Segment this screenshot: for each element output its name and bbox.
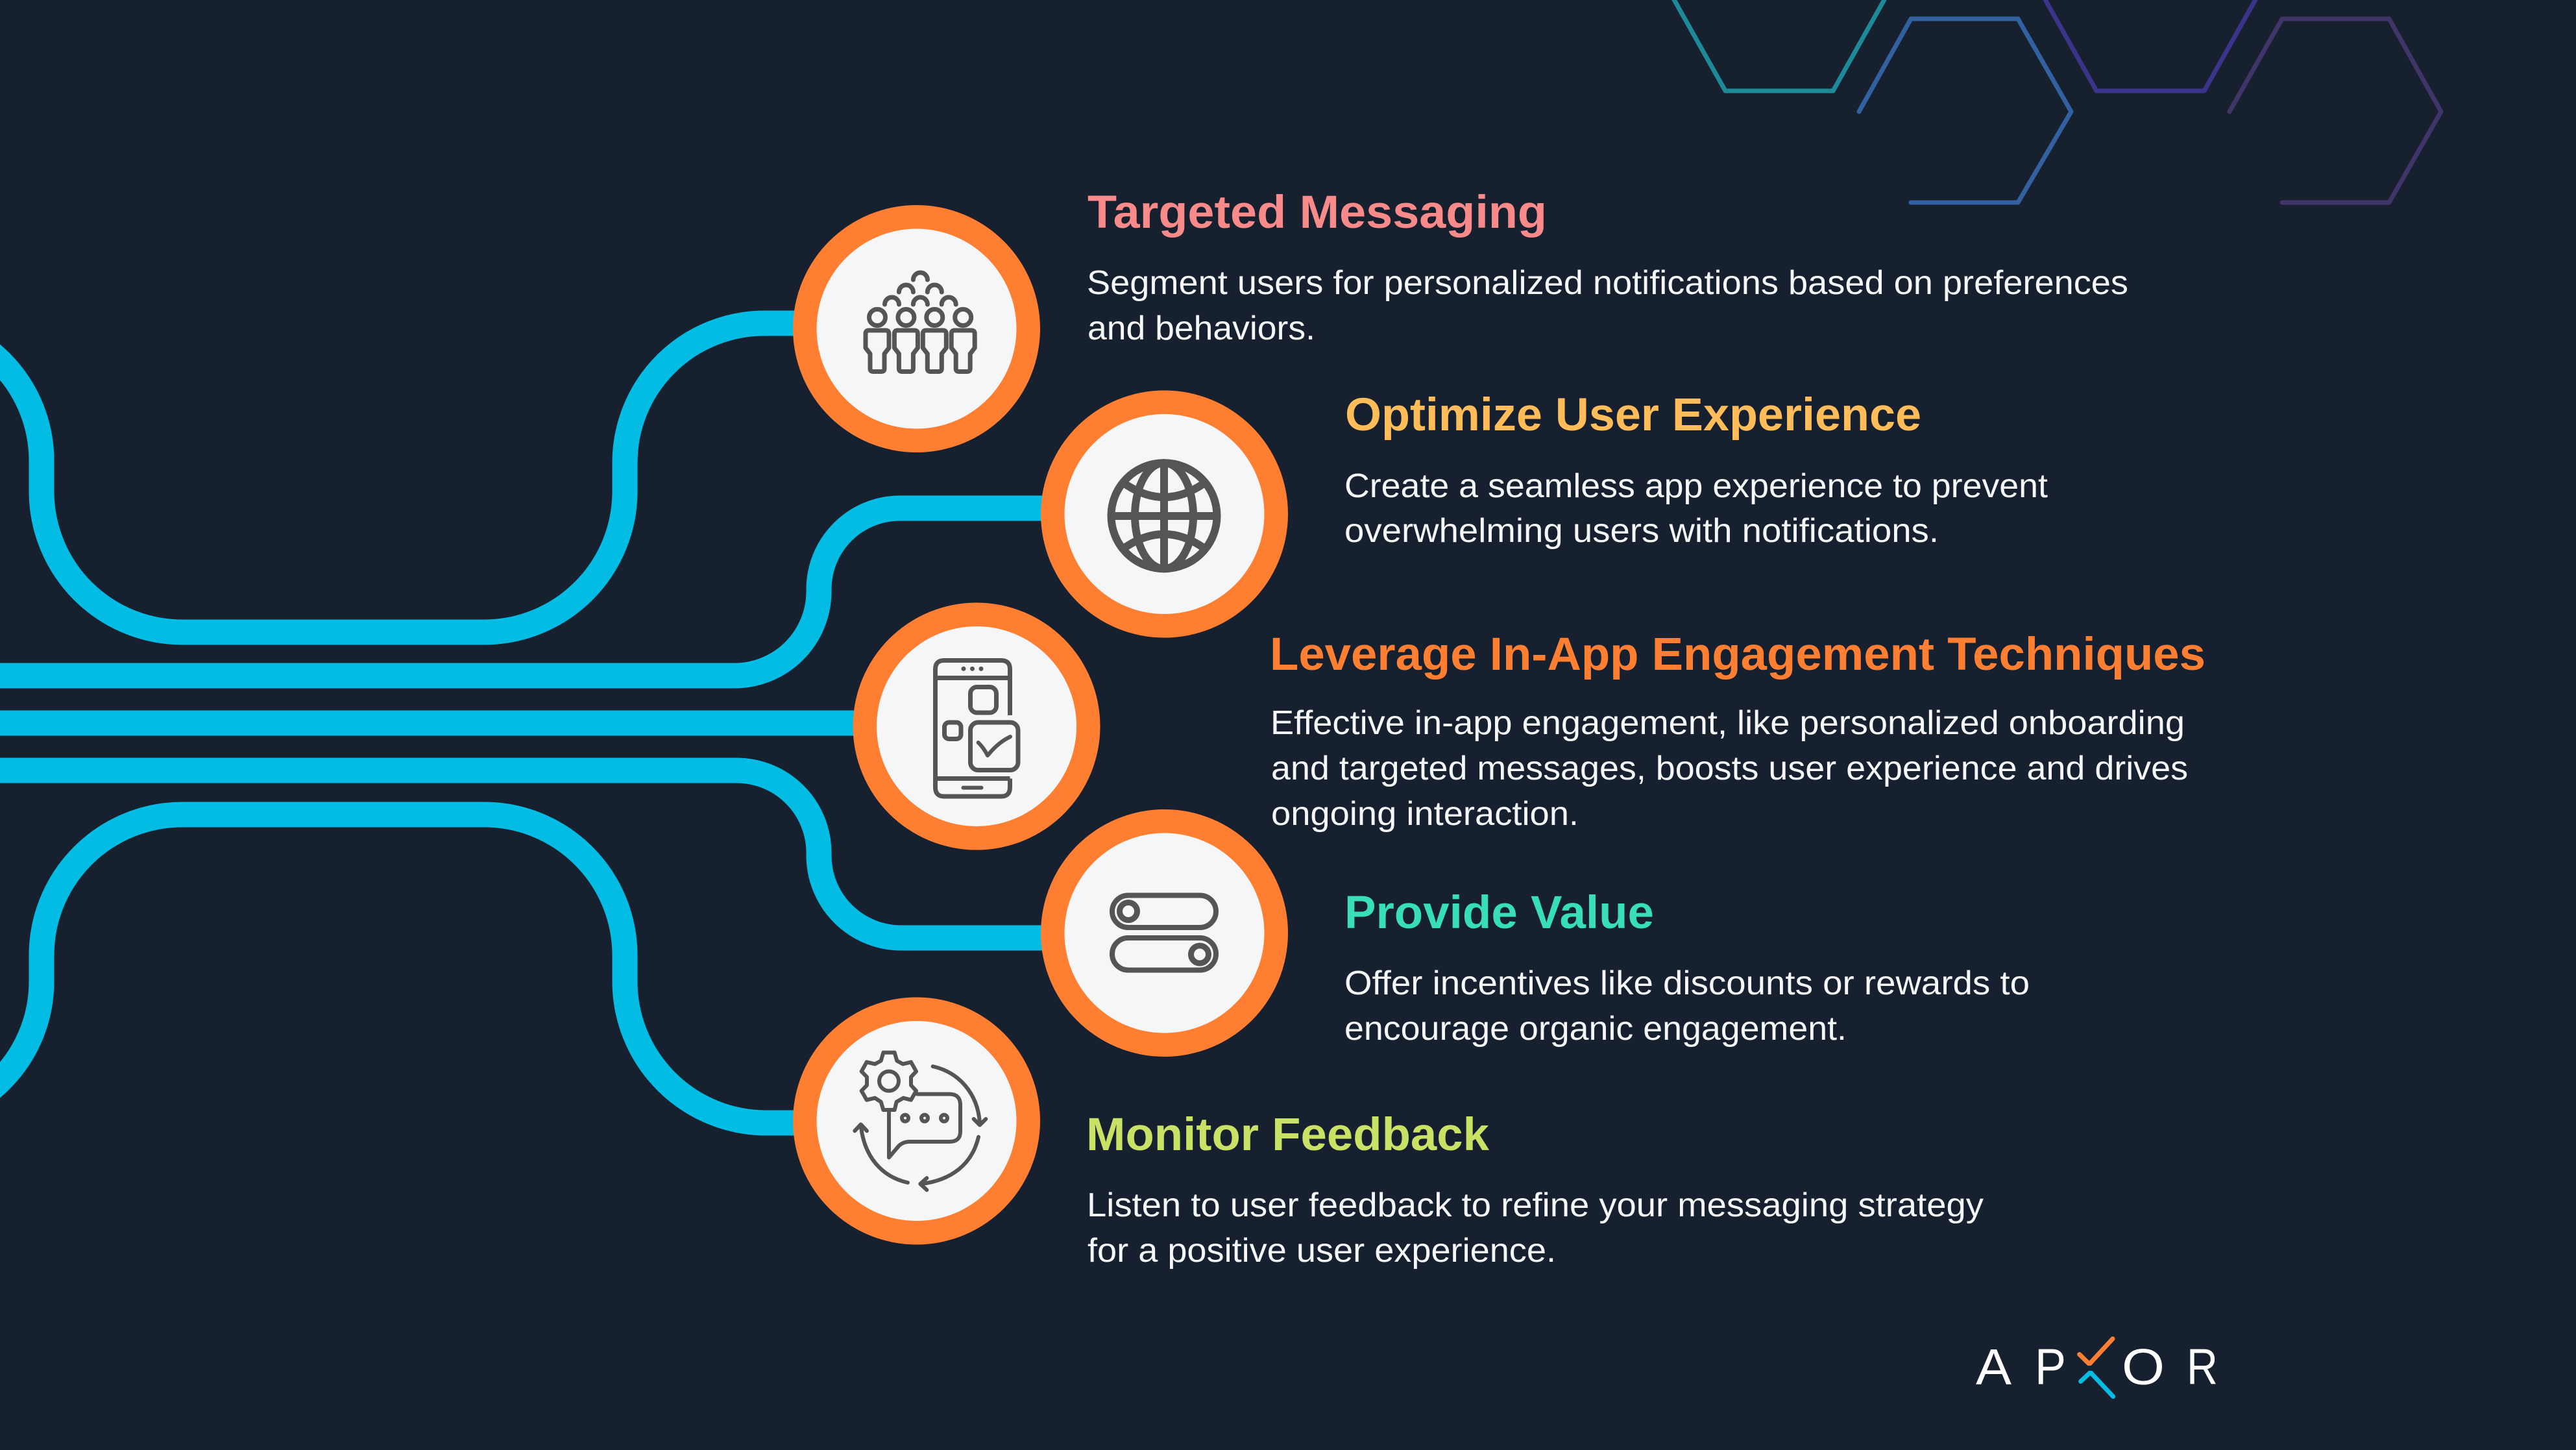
logo: APXOR: O <box>2122 1338 2165 1395</box>
text: leverage in-app engagement description <box>1270 704 2188 833</box>
heading: optimize user experience: Optimize User Experience <box>1345 389 1921 441</box>
decorative hexagon outlines <box>1673 0 2441 203</box>
text: leverage in-app engagement description: ongoing interaction. <box>1271 795 1579 833</box>
step 2: optimize user experience <box>1041 389 2048 637</box>
text: monitor feedback description <box>1087 1186 1984 1270</box>
logo: APXOR: P <box>2035 1338 2066 1395</box>
text: leverage in-app engagement description: and targeted messages, boosts user experience and drives <box>1271 750 2188 787</box>
text: leverage in-app engagement description: Effective in-app engagement, like personalized onboarding <box>1270 704 2185 742</box>
icon: crowd of people <box>793 205 1040 452</box>
text: provide value description: Offer incentives like discounts or rewards to <box>1344 965 2030 1002</box>
icon: phone with app tiles <box>853 602 1100 850</box>
text: targeted messaging description: Segment users for personalized notifications based on preferences <box>1087 264 2128 302</box>
text: monitor feedback description: for a positive user experience. <box>1088 1232 1556 1270</box>
heading: monitor feedback: Monitor Feedback <box>1086 1109 1490 1161</box>
step 3: leverage in-app engagement <box>853 602 2205 850</box>
icon: gear with chat bubble and cycle arrows <box>793 997 1040 1245</box>
connector lines <box>0 321 1051 1123</box>
icon: toggle switches <box>1041 809 1288 1057</box>
logo: APXOR: A <box>1976 1338 2011 1395</box>
icon: globe <box>1041 391 1288 637</box>
logo: APXOR <box>1976 1338 2218 1397</box>
text: optimize user experience description: Create a seamless app experience to prevent <box>1344 467 2048 505</box>
step 5: monitor feedback <box>793 997 1984 1270</box>
heading: provide value: Provide Value <box>1344 887 1654 939</box>
text: targeted messaging description <box>1087 264 2128 347</box>
step 4: provide value <box>1041 809 2030 1057</box>
heading: targeted messaging: Targeted Messaging <box>1088 187 1547 238</box>
text: optimize user experience description <box>1344 467 2048 550</box>
text: monitor feedback description: Listen to user feedback to refine your messaging strategy <box>1087 1186 1984 1224</box>
text: provide value description <box>1344 965 2030 1048</box>
text: targeted messaging description: and behaviors. <box>1088 310 1315 347</box>
step 1: targeted messaging <box>793 187 2128 452</box>
text: provide value description: encourage organic engagement. <box>1344 1010 1847 1048</box>
heading: leverage in-app engagement techniques: Leverage In-App Engagement Techniques <box>1270 629 2205 680</box>
logo: APXOR: R <box>2187 1338 2218 1395</box>
text: optimize user experience description: overwhelming users with notifications. <box>1344 512 1939 550</box>
